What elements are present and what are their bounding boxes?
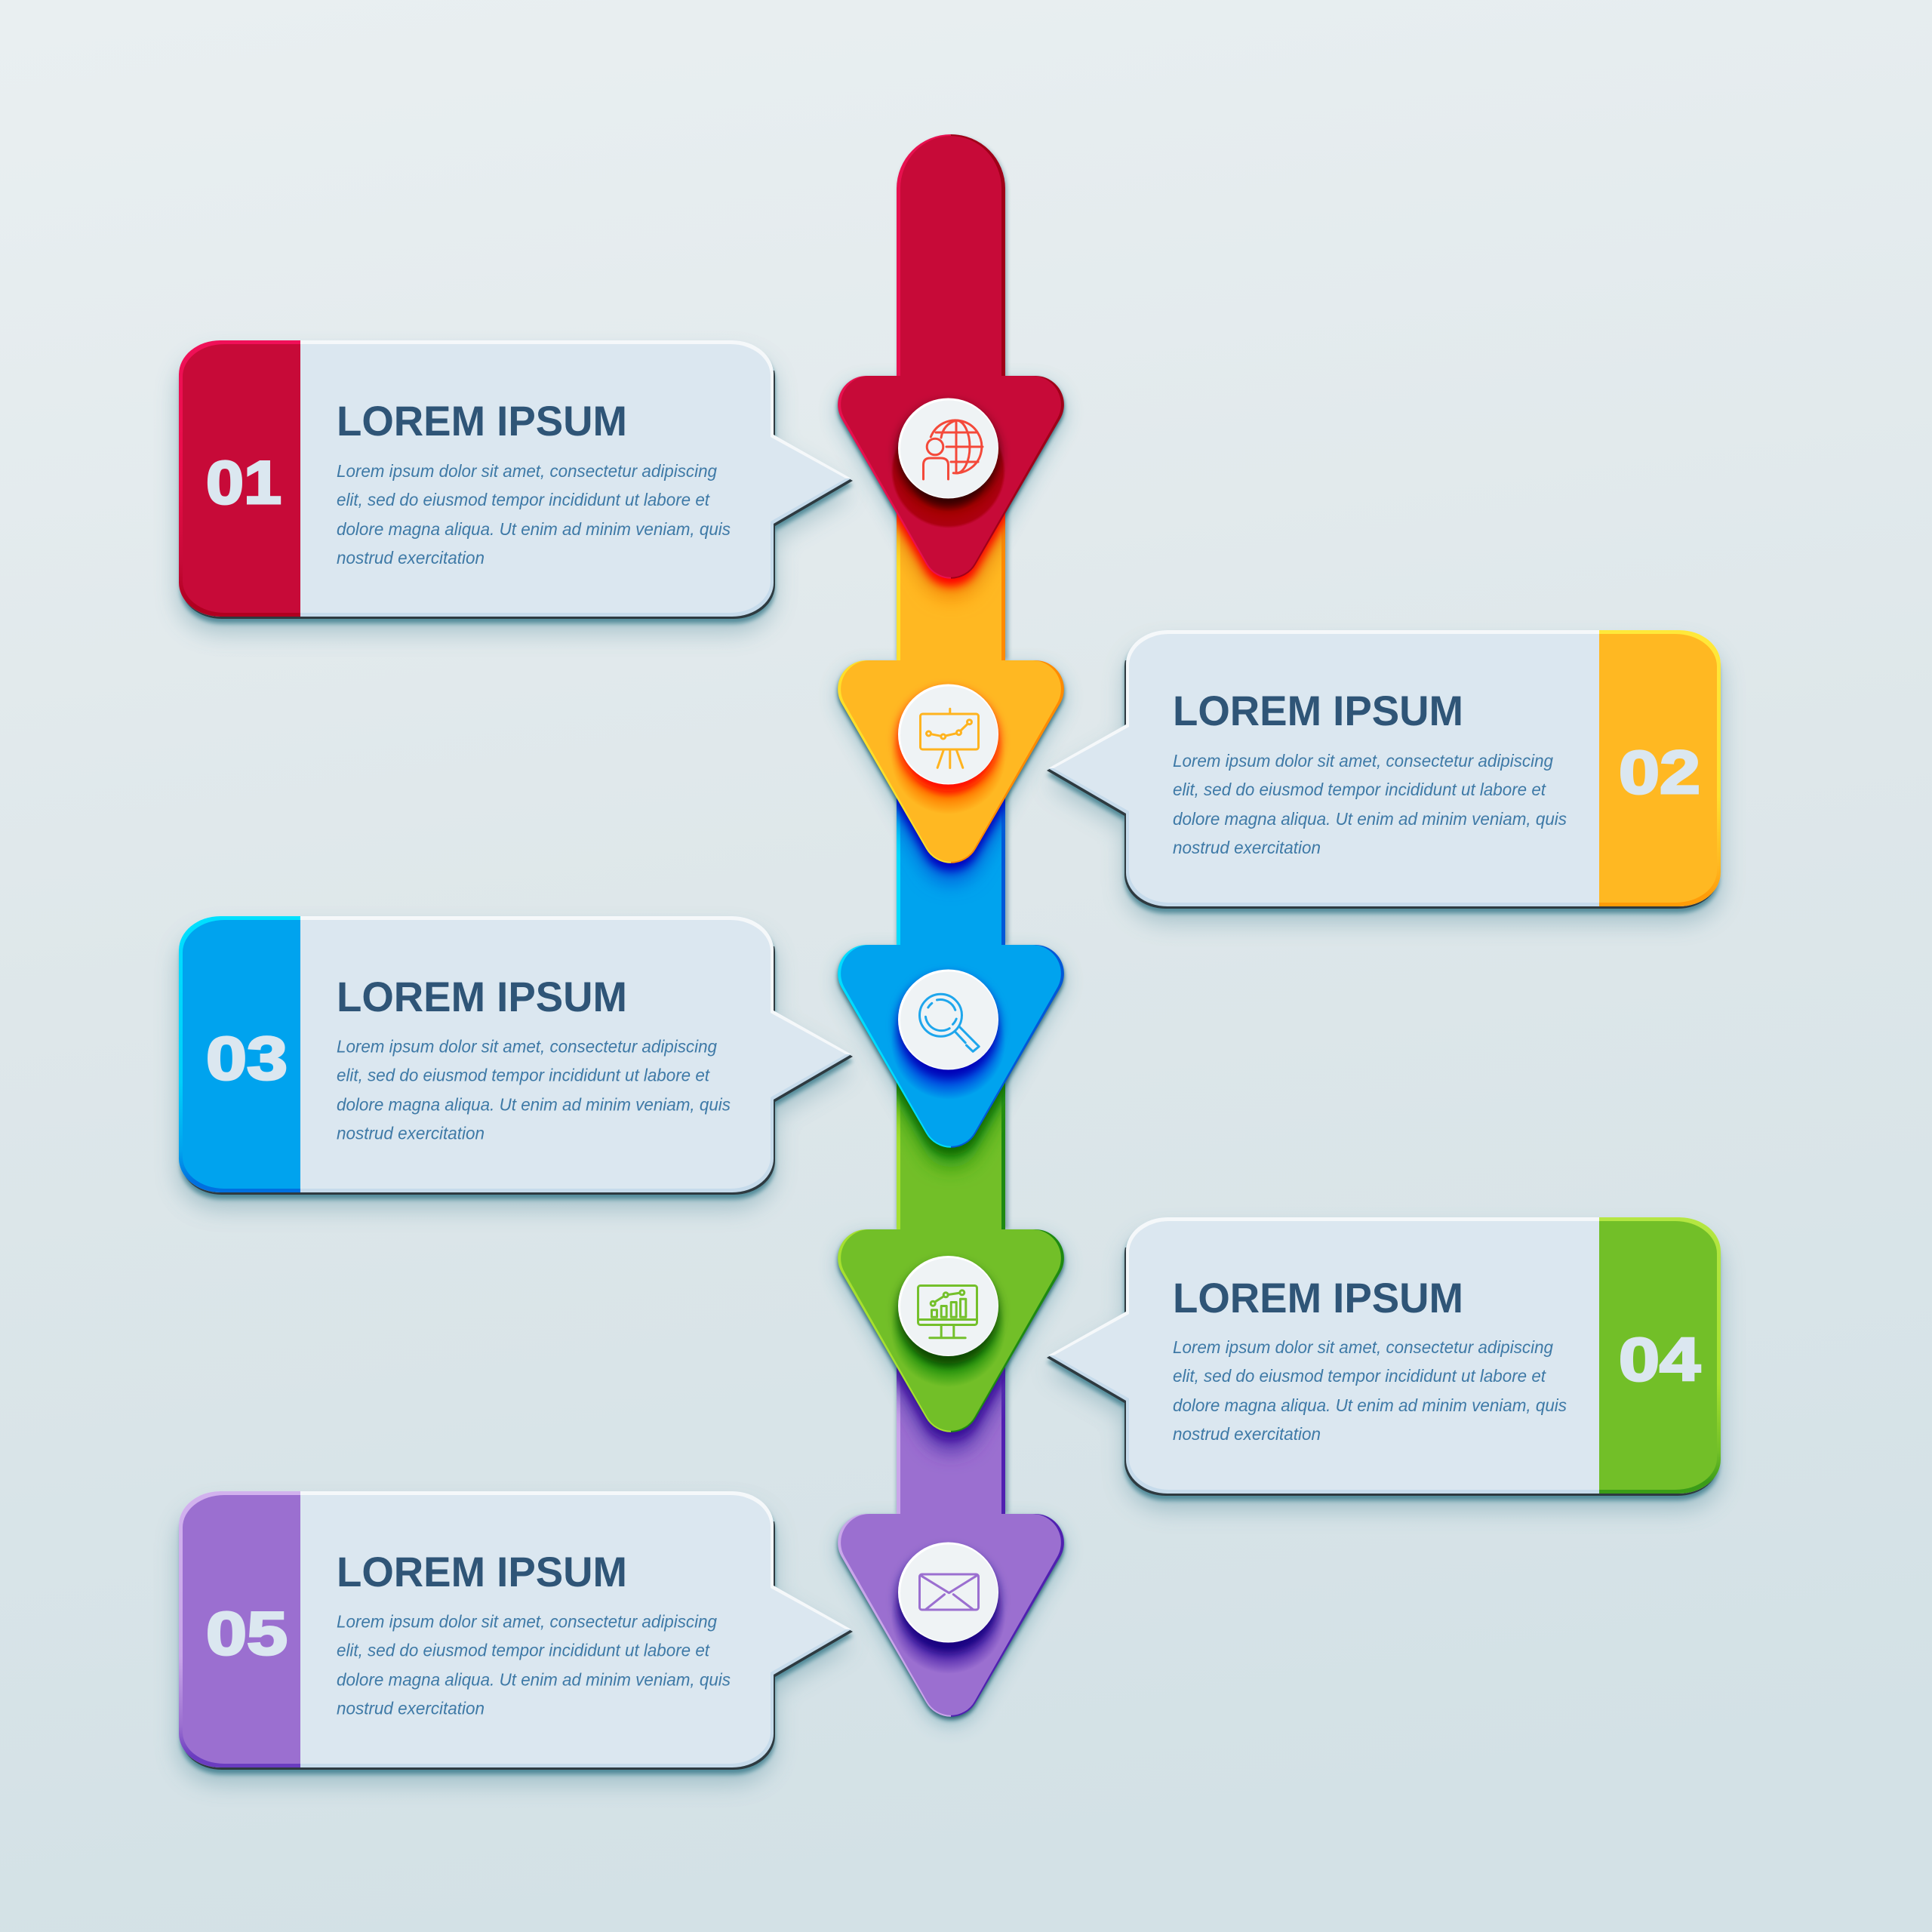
card 04 number: 04 bbox=[1619, 1326, 1700, 1394]
icon: magnifying glass bbox=[919, 994, 979, 1051]
icon disc 05 bbox=[898, 1543, 998, 1642]
card 05 body text: elit, sed do eiusmod tempor incididunt ut labore et bbox=[337, 1641, 711, 1660]
card 04 body text bbox=[1173, 1337, 1567, 1444]
card 04 body text: elit, sed do eiusmod tempor incididunt ut labore et bbox=[1173, 1366, 1547, 1386]
card 02 body text: Lorem ipsum dolor sit amet, consectetur adipiscing bbox=[1173, 751, 1553, 771]
icon disc 01 bbox=[898, 398, 998, 498]
icon disc 03 bbox=[898, 969, 998, 1070]
card 01 body text: nostrud exercitation bbox=[337, 548, 485, 568]
panel: card 03 bbox=[179, 916, 853, 1208]
card 05 body text: Lorem ipsum dolor sit amet, consectetur adipiscing bbox=[337, 1612, 717, 1632]
card 02 heading: LOREM IPSUM bbox=[1173, 687, 1463, 734]
card 04 number tab bbox=[1599, 1217, 1721, 1494]
card 01 body text bbox=[337, 461, 731, 568]
card 03 body text: Lorem ipsum dolor sit amet, consectetur adipiscing bbox=[337, 1037, 717, 1057]
card 03 body text: nostrud exercitation bbox=[337, 1123, 485, 1143]
icon disc 04 bbox=[898, 1256, 998, 1356]
icon: envelope bbox=[919, 1574, 978, 1610]
card 05 body text bbox=[337, 1612, 731, 1718]
card 04 body bbox=[1047, 1217, 1721, 1509]
arrow 02: yellow bbox=[838, 483, 1064, 883]
card 03 body text: dolore magna aliqua. Ut enim ad minim veniam, quis bbox=[337, 1094, 731, 1114]
arrow 05: purple bbox=[838, 1343, 1064, 1724]
card 03 body text: elit, sed do eiusmod tempor incididunt ut labore et bbox=[337, 1066, 711, 1085]
card 02 body text bbox=[1173, 751, 1567, 857]
arrow 01: red bbox=[838, 134, 1064, 598]
icon disc 02 bbox=[898, 684, 998, 785]
card 02 number: 02 bbox=[1619, 739, 1700, 807]
card 05 body bbox=[179, 1491, 853, 1783]
arrow 03: blue bbox=[838, 770, 1064, 1168]
card 05 heading: LOREM IPSUM bbox=[337, 1548, 627, 1595]
card 03 heading: LOREM IPSUM bbox=[337, 973, 627, 1020]
card 01 number: 01 bbox=[206, 449, 281, 517]
icon: monitor with chart bbox=[918, 1286, 977, 1338]
card 05 number tab bbox=[179, 1491, 300, 1767]
panel: card 02 bbox=[1047, 630, 1721, 921]
card 05 body text: nostrud exercitation bbox=[337, 1698, 485, 1718]
card 03 body bbox=[179, 916, 853, 1208]
panel: card 04 bbox=[1047, 1217, 1721, 1509]
card 01 number tab bbox=[179, 340, 300, 617]
icon: person with globe bbox=[924, 420, 983, 479]
card 02 body text: dolore magna aliqua. Ut enim ad minim veniam, quis bbox=[1173, 809, 1567, 829]
card 01 body text: elit, sed do eiusmod tempor incididunt ut labore et bbox=[337, 490, 711, 509]
card 02 body text: elit, sed do eiusmod tempor incididunt ut labore et bbox=[1173, 780, 1547, 799]
card 05 number: 05 bbox=[206, 1600, 288, 1668]
card 01 body text: Lorem ipsum dolor sit amet, consectetur adipiscing bbox=[337, 461, 717, 481]
card 05 body text: dolore magna aliqua. Ut enim ad minim veniam, quis bbox=[337, 1669, 731, 1689]
panel: card 01 bbox=[179, 340, 853, 632]
panel: card 05 bbox=[179, 1491, 853, 1783]
card 04 heading: LOREM IPSUM bbox=[1173, 1274, 1463, 1321]
arrow 04: green bbox=[838, 1057, 1064, 1452]
card 02 body bbox=[1047, 630, 1721, 921]
card 02 number tab bbox=[1599, 630, 1721, 906]
card 04 body text: nostrud exercitation bbox=[1173, 1424, 1321, 1444]
card 01 body text: dolore magna aliqua. Ut enim ad minim veniam, quis bbox=[337, 519, 731, 539]
card 03 body text bbox=[337, 1037, 731, 1143]
card 01 heading: LOREM IPSUM bbox=[337, 397, 627, 445]
card 03 number: 03 bbox=[206, 1025, 288, 1093]
card 02 body text: nostrud exercitation bbox=[1173, 838, 1321, 857]
card 03 number tab bbox=[179, 916, 300, 1192]
icon: presentation easel bbox=[921, 709, 978, 768]
card 04 body text: dolore magna aliqua. Ut enim ad minim veniam, quis bbox=[1173, 1395, 1567, 1415]
card 04 body text: Lorem ipsum dolor sit amet, consectetur adipiscing bbox=[1173, 1337, 1553, 1357]
card 01 body bbox=[179, 340, 853, 632]
